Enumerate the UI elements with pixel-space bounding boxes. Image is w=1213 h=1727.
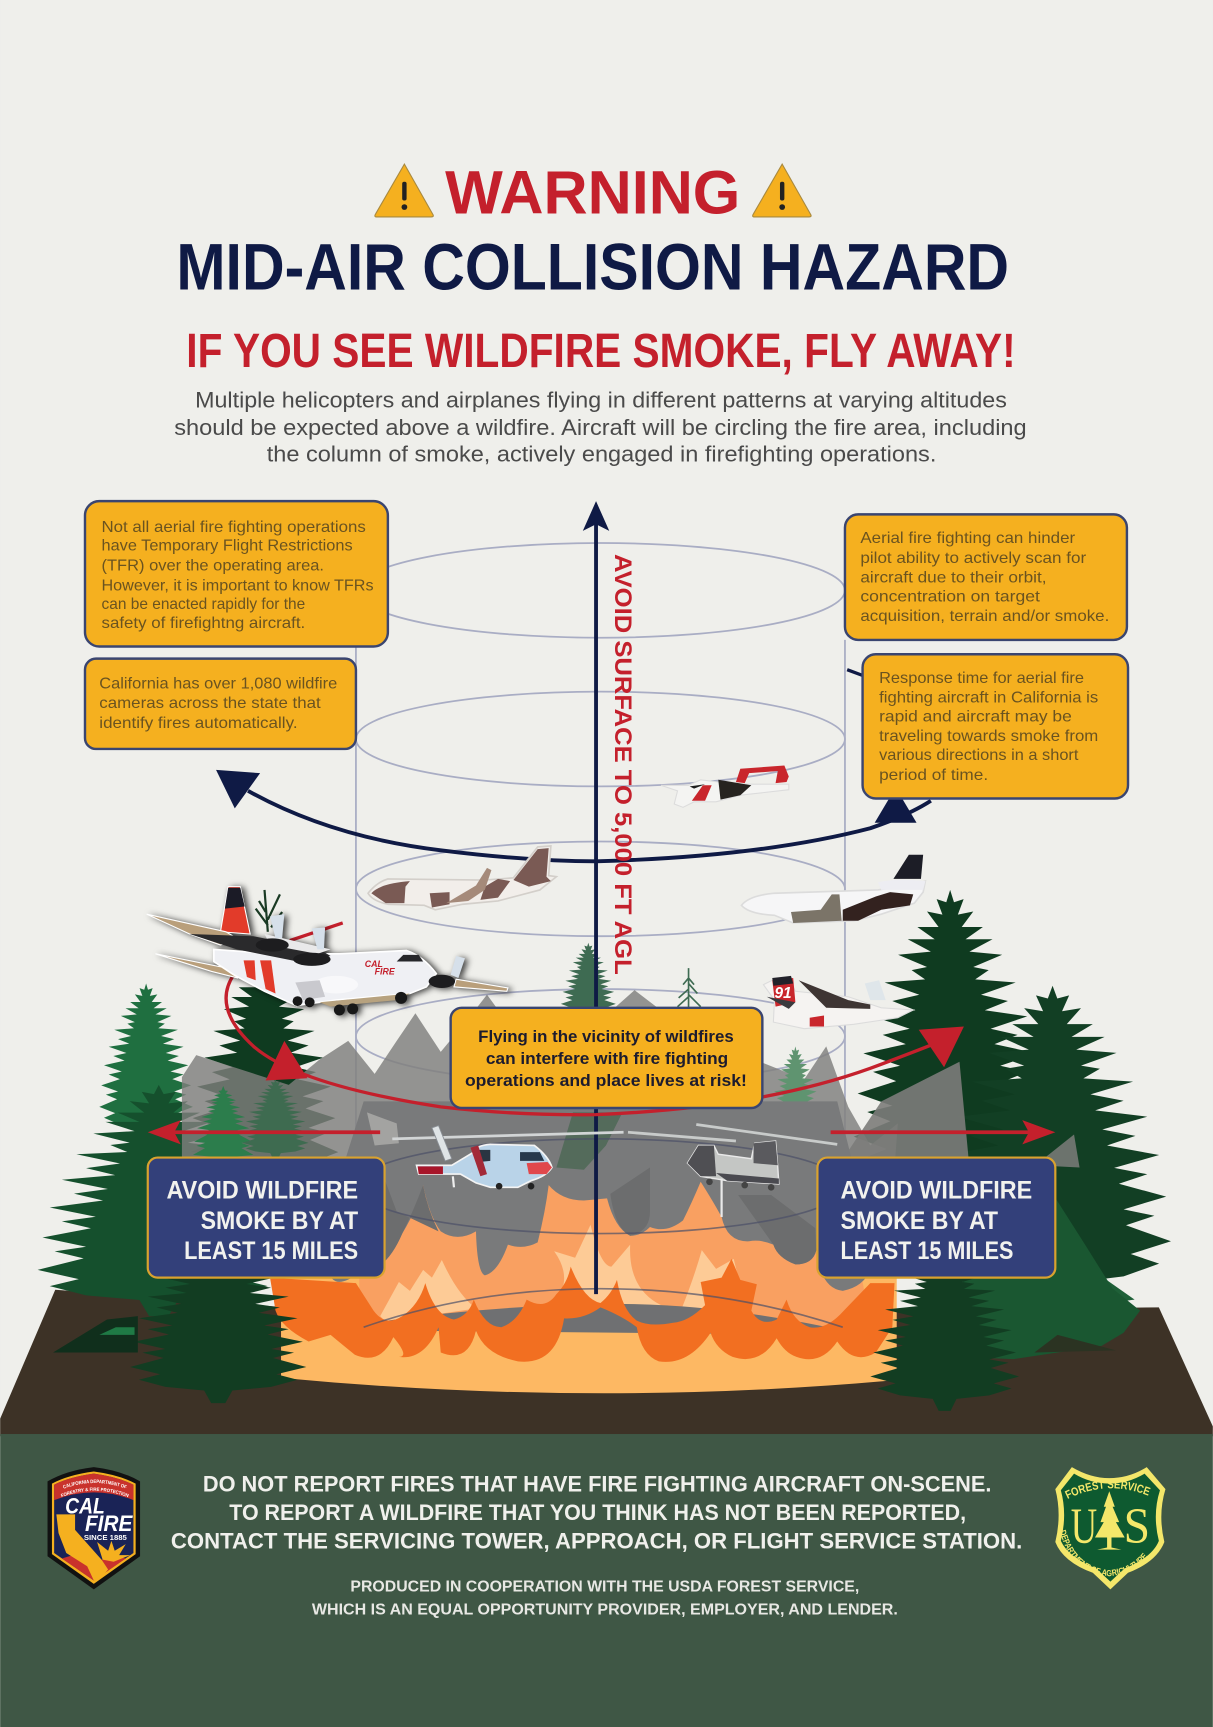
callout: pilot ability: Aerial fire fighting can hinder — [860, 530, 1076, 547]
callout: wildfire cameras — [85, 659, 356, 749]
intro paragraph: Multiple helicopters and airplanes flying in different patterns at varying altitudes — [195, 388, 1007, 413]
airspace cylinder — [356, 543, 845, 1335]
icon: warning triangle left — [375, 164, 433, 217]
green shade in smoke — [556, 1112, 622, 1170]
callout: response time: Response time for aerial fire — [879, 670, 1084, 687]
lower cylinder rings — [356, 1139, 845, 1327]
smoke band under flames — [380, 1304, 854, 1335]
tree: right dark top — [854, 890, 1047, 1198]
callout: flying in the vicinity — [451, 1008, 762, 1108]
fire base — [281, 1245, 897, 1393]
callout: flying in the vicinity: Flying in the vicinity of wildfires — [478, 1027, 734, 1046]
aircraft: Chinook helicopter — [628, 1125, 837, 1217]
icon: warning triangle right — [753, 164, 811, 217]
callout: response time: traveling towards smoke from — [879, 728, 1098, 745]
callout: temporary flight restrictions: can be enacted rapidly for the — [102, 596, 305, 613]
logo arc text top: FOREST SERVICE — [1064, 1482, 1151, 1499]
tree: left big — [38, 1085, 280, 1316]
subheading: fly away: IF YOU SEE WILDFIRE SMOKE, FLY AWAY! — [186, 324, 1016, 378]
aircraft: Firehawk helicopter — [392, 1126, 624, 1190]
tree: right green middle — [958, 1046, 1135, 1322]
callout: avoid wildfire smoke right: SMOKE BY AT — [841, 1207, 999, 1235]
footer reporting notice: DO NOT REPORT FIRES THAT HAVE FIRE FIGHTING AIRCRAFT ON-SCENE. — [203, 1471, 991, 1496]
tree: left back dark — [190, 958, 338, 1201]
callout: pilot ability — [845, 514, 1127, 640]
altitude label: AVOID SURFACE TO 5,000 FT AGL — [609, 554, 636, 975]
logo band text two: FORESTRY & FIRE PROTECTION — [60, 1488, 129, 1498]
callout: wildfire cameras: California has over 1,080 wildfire — [99, 675, 337, 692]
orbit arc behind tanker — [290, 923, 343, 941]
arrowhead right — [919, 1027, 964, 1067]
smoke lobes lighter — [367, 1112, 399, 1145]
aircraft marking: CAL — [365, 959, 383, 969]
callout: flying in the vicinity: operations and place lives at risk! — [465, 1071, 747, 1090]
logo letter U: U — [1071, 1498, 1097, 1554]
intro paragraph: should be expected above a wildfire. Aircraft will be circling the fire area, including — [174, 415, 1027, 440]
aircraft: S-2 air tanker — [763, 976, 913, 1029]
footer cooperation statement: WHICH IS AN EQUAL OPPORTUNITY PROVIDER, EMPLOYER, AND LENDER. — [312, 1602, 898, 1619]
callout: response time: fighting aircraft in California is — [879, 690, 1098, 707]
fire: peach flames — [359, 1167, 865, 1330]
warning title — [375, 159, 811, 228]
tree: sapling behind tanker tail — [256, 890, 282, 932]
callout: response time: period of time. — [879, 767, 988, 784]
tree: right outer dark — [934, 986, 1171, 1305]
red arrow right — [831, 1120, 1055, 1144]
ground — [0, 1290, 1213, 1436]
fire: pale inner flames — [380, 1225, 744, 1322]
logo letter S: S — [1124, 1498, 1150, 1554]
logo arc text bottom: DEPARTMENT OF AGRICULTURE — [1062, 1530, 1147, 1576]
footer reporting notice: CONTACT THE SERVICING TOWER, APPROACH, OR FLIGHT SERVICE STATION. — [171, 1529, 1022, 1554]
callout: pilot ability: acquisition, terrain and/or smoke. — [860, 608, 1109, 625]
aircraft: DC-10 air tanker — [741, 855, 925, 923]
callout: wildfire cameras: identify fires automatically. — [99, 715, 298, 732]
callout: response time: various directions in a short — [879, 747, 1079, 764]
ground shadow right — [1034, 1335, 1116, 1353]
tree: right green body — [958, 1167, 1140, 1359]
logo since date: SINCE 1885 — [84, 1533, 128, 1542]
callout: temporary flight restrictions: Not all aerial fire fighting operations — [102, 519, 366, 536]
callout: avoid wildfire smoke left — [148, 1158, 385, 1278]
callout: pilot ability: aircraft due to their orbit, — [860, 570, 1047, 587]
aircraft: brown tanker jet — [368, 846, 556, 910]
callout: temporary flight restrictions: safety of firefightng aircraft. — [102, 615, 305, 632]
callout: temporary flight restrictions — [85, 501, 388, 647]
callout: response time: rapid and aircraft may be — [879, 708, 1072, 725]
red orbit arrow — [226, 923, 964, 1115]
callout: temporary flight restrictions: have Temporary Flight Restrictions — [102, 538, 353, 555]
aircraft marking line two: FIRE — [375, 967, 396, 977]
fire: dark orange flames — [270, 1259, 895, 1362]
aircraft number: 91 — [774, 985, 792, 1002]
red arrow left — [148, 1120, 380, 1144]
callout: flying in the vicinity: can interfere with fire fighting — [486, 1049, 728, 1068]
intro paragraph: the column of smoke, actively engaged in firefighting operations. — [267, 441, 936, 466]
smoke column with scalloped bottom — [328, 1101, 873, 1291]
callout: avoid wildfire smoke left: AVOID WILDFIRE — [166, 1176, 358, 1204]
logo pine tree — [1095, 1491, 1125, 1550]
heading: mid-air collision hazard: MID-AIR COLLISION HAZARD — [176, 231, 1009, 305]
small background trees — [560, 943, 701, 1035]
callout: response time — [863, 654, 1128, 799]
translucent trees inside smoke — [193, 1046, 822, 1161]
callout: avoid wildfire smoke left: SMOKE BY AT — [201, 1207, 359, 1235]
footer reporting notice: TO REPORT A WILDFIRE THAT YOU THINK HAS NOT BEEN REPORTED, — [229, 1500, 966, 1525]
intro paragraph — [174, 388, 1027, 466]
heading: WARNING: WARNING — [445, 159, 740, 228]
footer cooperation statement — [312, 1579, 898, 1619]
vertical altitude arrow — [583, 501, 609, 1294]
smoke lobes darker — [360, 1167, 816, 1272]
callout: pilot ability: concentration on target — [860, 588, 1041, 605]
tree: lower right foreground — [870, 1239, 1019, 1411]
callout: avoid wildfire smoke right: AVOID WILDFIRE — [841, 1176, 1032, 1204]
logo: CAL FIRE — [48, 1467, 140, 1590]
arrowhead right — [875, 788, 917, 823]
aircraft: C-130 air tanker — [147, 887, 508, 1015]
tree: lower left foreground — [53, 1223, 306, 1403]
callout: pilot ability: pilot ability to actively scan for — [860, 550, 1087, 567]
footer band — [0, 1434, 1213, 1727]
dark curved arrow — [216, 670, 931, 861]
callout: temporary flight restrictions: (TFR) over the operating area. — [102, 558, 324, 575]
footer reporting notice — [171, 1471, 1022, 1554]
logo wordmark FIRE: FIRE — [85, 1511, 134, 1536]
tree: left front tall — [99, 984, 193, 1138]
callout: temporary flight restrictions: However, it is important to know TFRs — [102, 577, 374, 594]
callout: avoid wildfire smoke right — [817, 1158, 1055, 1278]
arrowhead left — [216, 770, 260, 808]
arrowhead left — [266, 1041, 307, 1080]
logo wordmark CAL: CAL — [65, 1493, 105, 1518]
arrow stub behind callout — [847, 670, 865, 676]
logo: US Forest Service — [1055, 1467, 1166, 1590]
mountains of grey smoke — [182, 990, 1080, 1212]
logo band text: CALIFORNIA DEPARTMENT OF — [63, 1480, 127, 1488]
callout: wildfire cameras: cameras across the state that — [99, 695, 321, 712]
footer cooperation statement: PRODUCED IN COOPERATION WITH THE USDA FOREST SERVICE, — [350, 1579, 859, 1596]
aircraft: twin boom spotter — [661, 765, 789, 807]
callout: avoid wildfire smoke left: LEAST 15 MILES — [184, 1237, 358, 1265]
callout: avoid wildfire smoke right: LEAST 15 MILES — [841, 1237, 1013, 1265]
